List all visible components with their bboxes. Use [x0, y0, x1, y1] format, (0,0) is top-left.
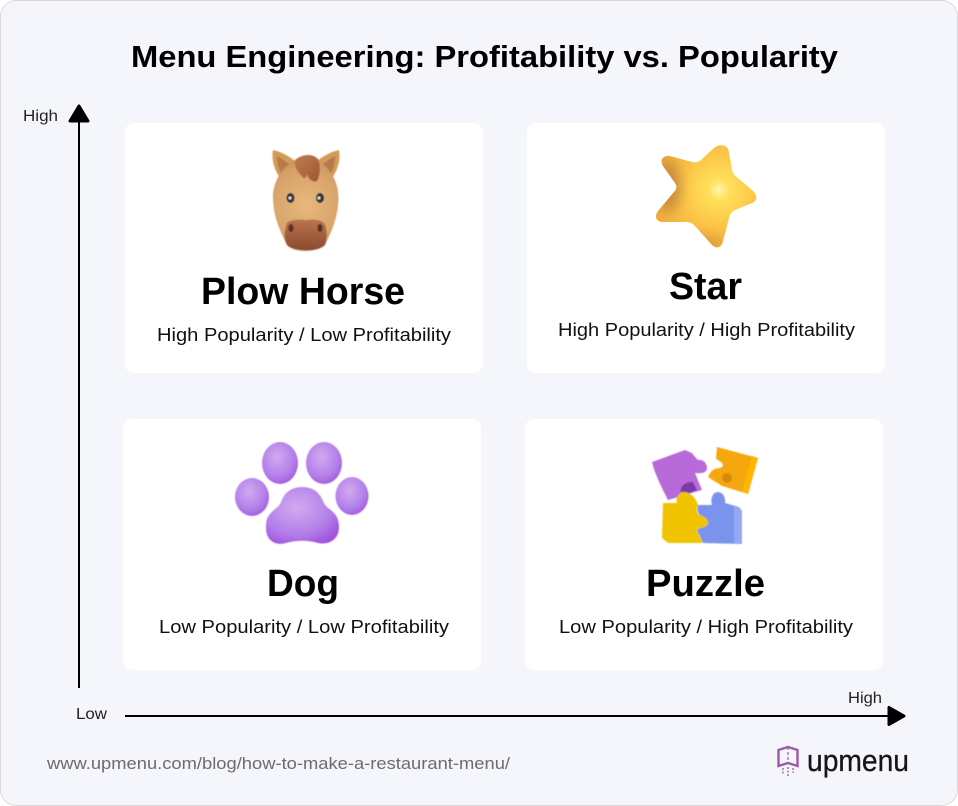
icon: paw: [235, 442, 368, 544]
logo: upmenu: [778, 743, 909, 778]
icon: puzzle pieces: [652, 447, 758, 544]
panel: dog: [123, 419, 481, 670]
text: plow horse description: High Popularity / Low Profitability: [157, 325, 451, 345]
title: Menu Engineering: Profitability vs. Popularity: [131, 39, 839, 74]
icon: star: [656, 145, 756, 248]
panel: star: [527, 123, 885, 373]
wordmark: upmenu: [807, 743, 909, 778]
arrow: horizontal axis: [125, 708, 904, 724]
text: dog description: Low Popularity / Low Profitability: [159, 617, 449, 637]
text: puzzle description: Low Popularity / High Profitability: [559, 617, 853, 637]
arrow: vertical axis: [70, 106, 88, 688]
axis label: high popularity: High: [23, 108, 58, 125]
vertical axis: [23, 106, 88, 688]
icon: horse head: [272, 150, 340, 251]
axis label: low: Low: [76, 706, 107, 723]
text: star description: High Popularity / High Profitability: [558, 320, 855, 340]
heading: dog: Dog: [267, 563, 339, 605]
axis label: high profitability: High: [848, 690, 882, 707]
heading: star: Star: [669, 266, 742, 308]
source url: www.upmenu.com/blog/how-to-make-a-restaurant-menu/: [46, 754, 510, 773]
panel: plow horse: [125, 123, 483, 373]
panel: puzzle: [525, 419, 883, 670]
horizontal axis: [76, 690, 904, 724]
icon: upmenu book: [778, 747, 798, 776]
heading: plow horse: Plow Horse: [201, 271, 405, 313]
heading: puzzle: Puzzle: [646, 563, 765, 605]
